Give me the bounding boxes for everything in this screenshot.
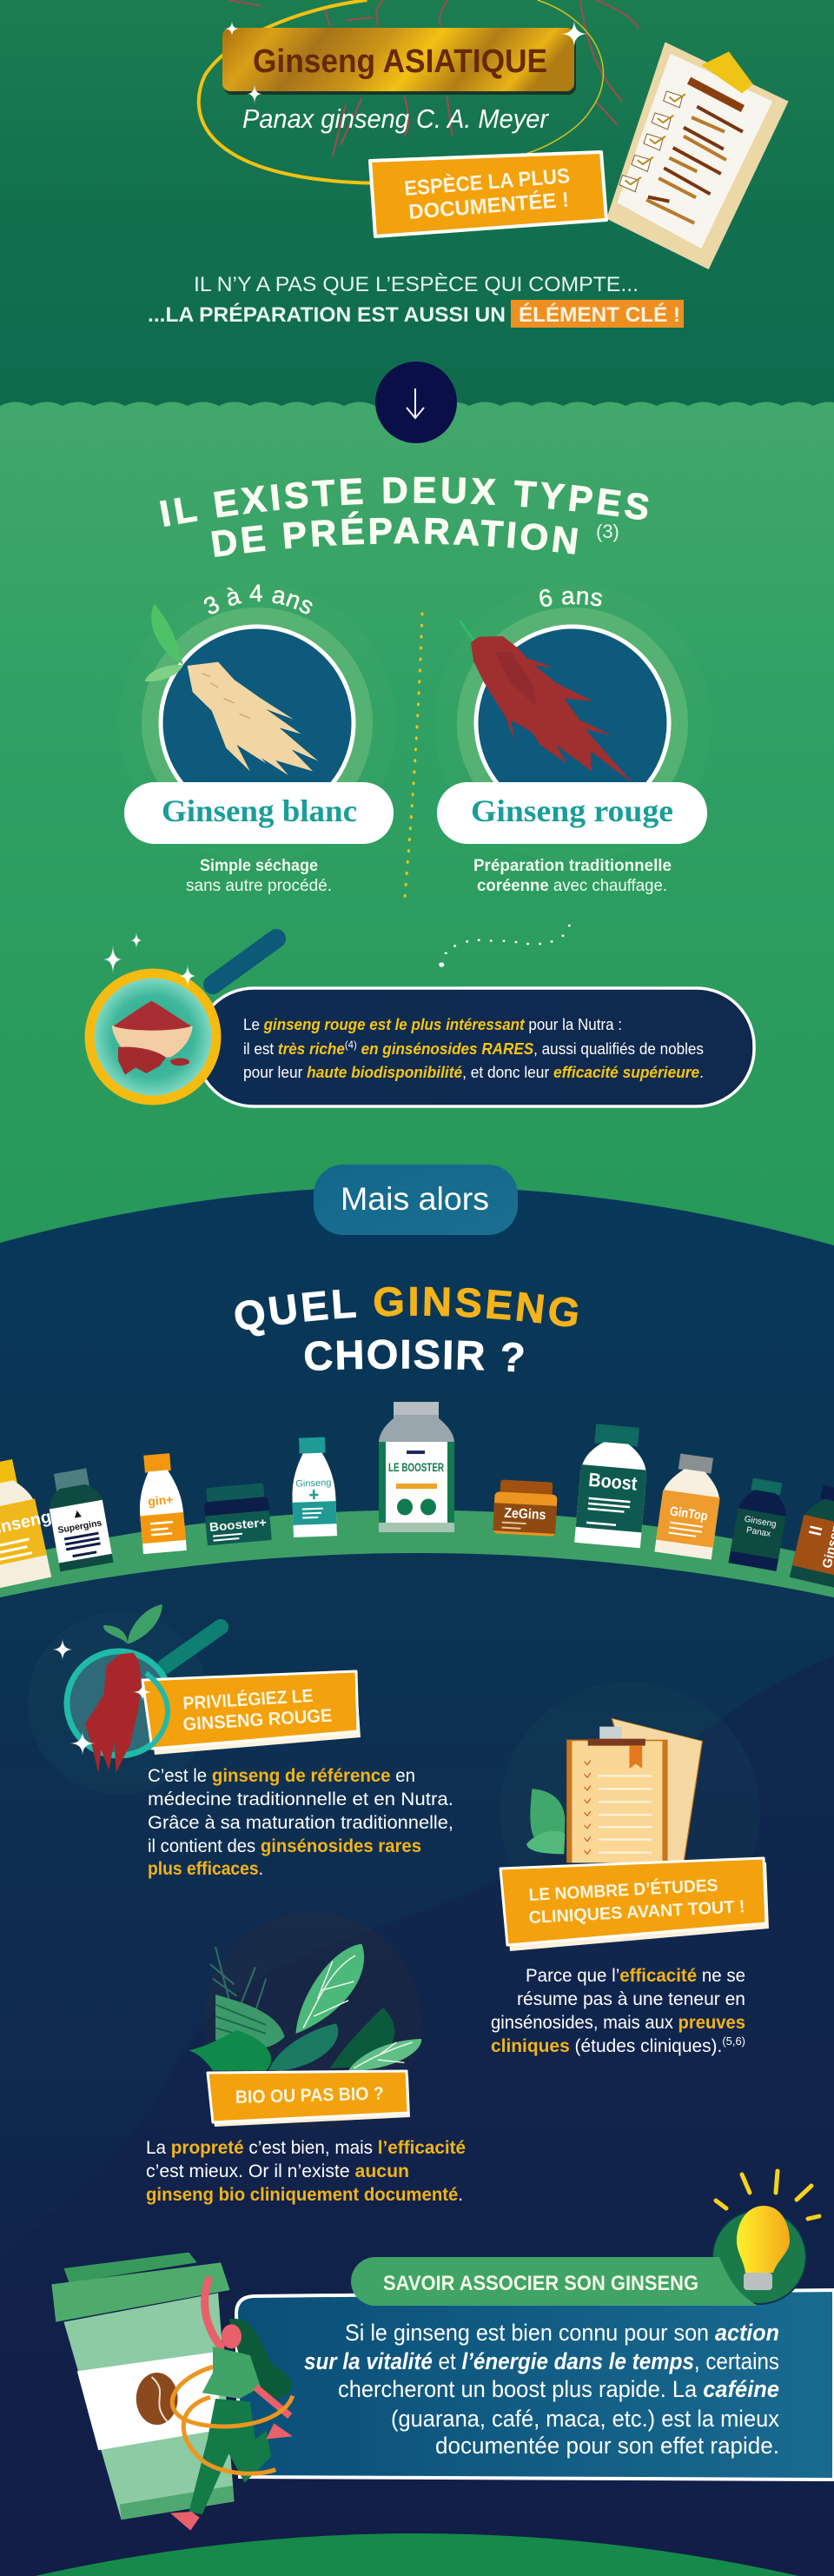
subtitle: Panax ginseng: Panax ginseng C. A. Meyer — [242, 103, 550, 134]
yellow hand-drawn ellipse and ginseng roots — [199, 0, 639, 183]
illustration: red ginseng root — [460, 621, 633, 784]
bottle: Supergins: Supergins — [57, 1517, 103, 1536]
dotted divider — [404, 614, 422, 906]
bottle: Ginseng Panax: Ginseng — [744, 1515, 777, 1530]
body text: résume pas à une teneur en — [517, 1989, 745, 2009]
body text: Parce que l’efficacité ne se — [526, 1966, 745, 1986]
bottles row — [0, 1402, 834, 1590]
body text: il contient des ginsénosides rares — [148, 1836, 421, 1856]
pill title: Ginseng rouge: Ginseng rouge — [471, 793, 673, 828]
pill: Mais alors — [314, 1165, 518, 1235]
halo — [500, 1682, 760, 1942]
label: privilégiez le ginseng rouge: GINSENG ROUGE — [182, 1706, 333, 1735]
body text: c’est mieux. Or il n’existe aucun — [146, 2161, 409, 2181]
body text — [148, 1766, 453, 1879]
sparkles on banner — [224, 20, 588, 104]
label: espèce la plus documentée: ESPÈCE LA PLUS — [403, 163, 571, 201]
heading: quel ginseng choisir: CHOISIR ? — [304, 1339, 523, 1371]
section: bio ou pas bio — [146, 1912, 466, 2205]
title banner: Ginseng ASIATIQUE — [222, 28, 576, 95]
background: top dark green section — [0, 0, 834, 417]
callout text: Le ginseng rouge est le plus intéressant pour la Nutra : — [243, 1016, 622, 1033]
illustration: white ginseng root — [145, 604, 318, 775]
caption: Préparation traditionnelle — [473, 857, 672, 875]
shelf: green arc — [0, 1510, 834, 1597]
bottle: Ginseng + — [290, 1437, 337, 1537]
background: mid green section with wavy top — [0, 402, 834, 1269]
circle with halo — [434, 584, 712, 862]
label: bio ou pas bio: BIO OU PAS BIO ? — [235, 2084, 384, 2108]
heading: il existe deux types de préparation — [160, 476, 648, 557]
body text: (5,6) — [722, 2035, 745, 2048]
body text: médecine traditionnelle et en Nutra. — [148, 1789, 453, 1809]
body text: cliniques (études cliniques). — [491, 2036, 723, 2056]
body text: C’est le ginseng de référence en — [148, 1766, 415, 1786]
callout text: en ginsénosides RARES, aussi qualifiés de nobles — [361, 1040, 712, 1058]
label: le nombre d'études cliniques: CLINIQUES AVANT TOUT ! — [528, 1897, 745, 1928]
cup — [51, 2253, 234, 2520]
pill title: Ginseng blanc: Ginseng blanc — [162, 793, 357, 828]
label: le nombre d'études cliniques — [500, 1858, 769, 1951]
body text — [146, 2138, 466, 2205]
icon: magnifier with red root — [28, 1604, 221, 1795]
panel: ginseng rouge — [437, 589, 707, 895]
body text: plus efficaces. — [148, 1859, 263, 1879]
magnifier lens with red powder bowl — [89, 973, 216, 1100]
icon: leaves bouquet — [189, 1944, 421, 2071]
background: navy wave shape — [0, 1656, 834, 2576]
bottle: Boost: Boost — [587, 1469, 639, 1495]
circle with halo — [118, 584, 396, 862]
magnifier handle — [213, 939, 276, 985]
heading: quel ginseng choisir: QUEL GINSENG — [235, 1286, 579, 1337]
heading: il existe deux types de préparation: (3) — [596, 521, 619, 542]
bottle: ZeGins: ZeGins — [504, 1506, 546, 1523]
bottle: yellow ginseng — [0, 1454, 63, 1590]
body text: ginseng bio cliniquement documenté. — [146, 2185, 463, 2205]
illustration: coffee cup and woman with hoop — [51, 2253, 293, 2531]
icon: clipboard checklist — [606, 42, 789, 269]
heading: quel ginseng choisir — [235, 1286, 579, 1371]
halo — [204, 1912, 421, 2129]
caption — [473, 857, 672, 895]
bottle: brown ginseng — [790, 1483, 834, 1590]
bottle: Supergins — [43, 1466, 114, 1571]
section: savoir associer son ginseng — [51, 2171, 834, 2531]
body text: sur la vitalité et l’énergie dans le temps, certains — [304, 2348, 779, 2374]
icon: documents and leaves — [526, 1718, 702, 1862]
woman — [170, 2280, 293, 2531]
panel: ginseng blanc — [124, 584, 394, 895]
sparkles — [103, 932, 196, 988]
background: dark navy dome section — [0, 1186, 834, 2576]
label: espèce la plus documentée — [370, 152, 606, 236]
bottle: Ginseng +: Ginseng — [295, 1477, 332, 1490]
label: le nombre d'études cliniques: LE NOMBRE D’ÉTUDES — [528, 1876, 718, 1905]
callout: magnifier and text panel — [89, 932, 754, 1106]
bottle: GinTop: GinTop — [669, 1504, 709, 1524]
bottle: Booster+ — [202, 1483, 272, 1545]
bottle: GinTop — [654, 1452, 725, 1560]
callout text: pour leur haute biodisponibilité, et donc leur efficacité supérieure. — [243, 1064, 704, 1081]
title banner: Ginseng ASIATIQUE: Ginseng ASIATIQUE — [253, 43, 547, 80]
heading pill: SAVOIR ASSOCIER SON GINSENG — [383, 2272, 698, 2295]
callout text: (4) — [345, 1039, 357, 1051]
heading pill — [351, 2257, 758, 2306]
icon: down arrow in navy circle — [375, 362, 457, 443]
caption: Simple séchage — [200, 857, 318, 875]
white dotted trail — [439, 925, 571, 967]
caption: coréenne avec chauffage. — [477, 877, 667, 895]
bottle: gin+: gin+ — [148, 1492, 174, 1508]
body text — [491, 1966, 745, 2056]
age label: 6 ans: 6 ans — [539, 589, 602, 607]
text: il n'y a pas que l'espèce: IL N’Y A PAS QUE L’ESPÈCE QUI COMPTE... — [194, 273, 639, 296]
heading: il existe deux types de préparation: DE PRÉPARATION — [211, 511, 578, 557]
label: privilégiez le ginseng rouge: PRIVILÉGIEZ LE — [182, 1686, 314, 1714]
text panel — [196, 988, 754, 1106]
body text: (guarana, café, maca, etc.) est la mieux — [391, 2406, 779, 2432]
label: espèce la plus documentée: DOCUMENTÉE ! — [407, 188, 570, 224]
body text: Grâce à sa maturation traditionnelle, — [148, 1813, 453, 1833]
bottle: ZeGins — [493, 1479, 558, 1537]
bottle: Booster+: Booster+ — [208, 1515, 268, 1534]
label: bio ou pas bio — [208, 2071, 410, 2127]
body text: chercheront un boost plus rapide. La caféine — [338, 2376, 779, 2402]
pill title: Ginseng rouge — [437, 782, 707, 844]
heading: il existe deux types de préparation: IL EXISTE DEUX TYPES — [160, 476, 648, 527]
section: nombre d'études cliniques — [491, 1682, 769, 2056]
bottle: gin+ — [135, 1452, 187, 1554]
callout text — [243, 1016, 704, 1081]
body text: Si le ginseng est bien connu pour son action — [345, 2320, 779, 2346]
icon: light bulb with rays — [712, 2171, 819, 2304]
body text — [304, 2320, 779, 2459]
bottle: Ginseng Panax — [728, 1477, 791, 1571]
body text: La propreté c’est bien, mais l’efficacité — [146, 2138, 466, 2158]
callout text: il est très riche — [243, 1040, 348, 1058]
pill: Mais alors: Mais alors — [341, 1181, 489, 1217]
bottle: LE BOOSTER: LE BOOSTER — [388, 1461, 444, 1474]
age label: 3 à 4 ans: 3 à 4 ans — [203, 584, 313, 614]
bottle: LE BOOSTER — [379, 1402, 454, 1532]
text panel — [236, 2290, 834, 2480]
pill title: Ginseng blanc — [124, 782, 394, 844]
sparkles and ring over label — [52, 1638, 168, 1756]
label: privilégiez le ginseng rouge — [142, 1671, 361, 1755]
caption — [186, 857, 332, 895]
highlight: élément clé: ÉLÉMENT CLÉ ! — [519, 302, 680, 327]
body text: documentée pour son effet rapide. — [435, 2433, 779, 2459]
caption: sans autre procédé. — [186, 877, 332, 895]
section: privilégiez le ginseng rouge — [28, 1604, 453, 1879]
bottom green dome — [35, 2533, 799, 2576]
bottle: Boost — [574, 1423, 651, 1548]
body text: ginsénosides, mais aux preuves — [491, 2013, 745, 2033]
text: la préparation est aussi un: ...LA PRÉPARATION EST AUSSI UN — [148, 302, 506, 327]
bottle: Ginseng Panax: Panax — [745, 1525, 771, 1539]
